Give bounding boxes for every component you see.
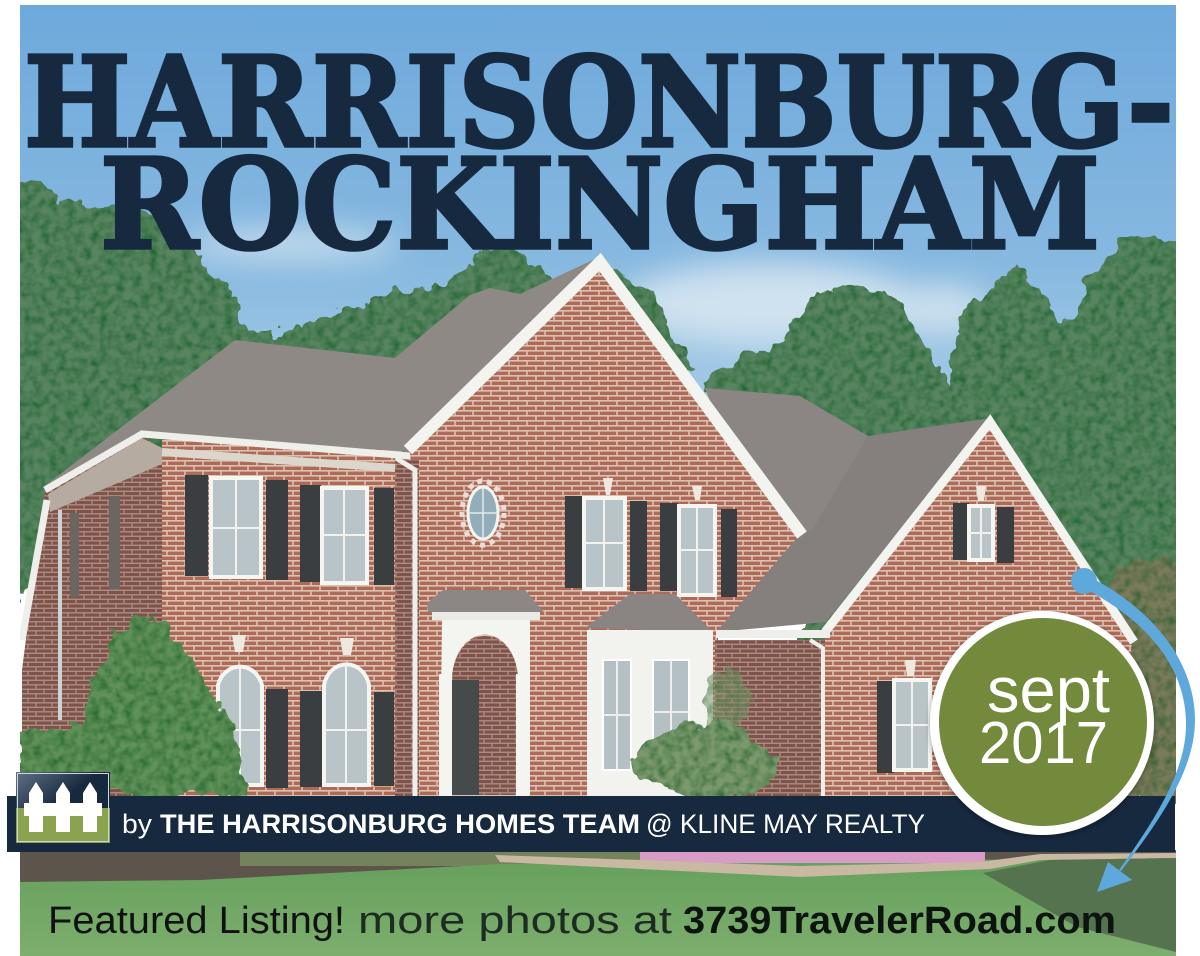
pink flowers bbox=[640, 851, 985, 863]
house: windows bbox=[211, 478, 993, 785]
house: rear right roof bbox=[705, 388, 868, 540]
shrub: small tree by the bay bbox=[633, 667, 777, 798]
footer caption: 3739TravelerRoad.com bbox=[683, 900, 1116, 942]
seal text bbox=[979, 654, 1110, 776]
house: keystones bbox=[232, 478, 986, 676]
house: front porch bbox=[427, 590, 544, 796]
house: right wing walls bbox=[715, 640, 825, 798]
seal text: sept bbox=[987, 654, 1110, 726]
lawn shadow bbox=[983, 858, 1176, 952]
seal text: 2017 bbox=[979, 710, 1108, 776]
house: cornices and gutters bbox=[22, 434, 830, 796]
trees: right bbox=[700, 235, 1200, 800]
house: bay window bbox=[585, 594, 713, 796]
house: window muntins bbox=[211, 480, 993, 785]
house: oval window bbox=[462, 481, 504, 545]
mulch bed bbox=[20, 850, 1176, 882]
house: shutters bbox=[185, 475, 1014, 788]
lawn bbox=[20, 858, 1176, 956]
footer caption: Featured Listing! bbox=[48, 900, 345, 942]
trees: left and middle bbox=[20, 180, 696, 603]
sky bbox=[20, 5, 1176, 425]
house: right wing roof bbox=[716, 418, 990, 632]
house: upper roof bbox=[395, 258, 597, 450]
banner bbox=[7, 796, 1175, 852]
house: left wing roof bbox=[42, 340, 428, 488]
house: center wall bbox=[395, 262, 802, 798]
house: side windows bbox=[70, 496, 120, 597]
footer caption: more photos at bbox=[358, 900, 673, 942]
arrow: from house to web address bbox=[1071, 568, 1195, 892]
house: right gable trim bbox=[825, 422, 1134, 642]
clouds bbox=[180, 231, 990, 347]
shrubs along the walk bbox=[240, 852, 640, 866]
house: left side wall bbox=[22, 436, 162, 798]
house: main gable trim bbox=[408, 262, 802, 535]
byline: THE HARRISONBURG HOMES TEAM bbox=[160, 809, 640, 839]
shrub: large left bush bbox=[20, 614, 245, 795]
house: front left wall bbox=[162, 440, 402, 798]
seal: sept 2017 bbox=[930, 611, 1154, 835]
walkway bbox=[495, 853, 1176, 877]
footer caption bbox=[48, 900, 1116, 942]
byline bbox=[122, 809, 925, 839]
byline: by bbox=[122, 809, 153, 839]
byline: @ KLINE MAY REALTY bbox=[646, 809, 925, 839]
title bbox=[24, 30, 1174, 278]
logo: picket fence bbox=[16, 772, 110, 843]
title: ROCKINGHAM bbox=[100, 132, 1100, 278]
house: left soffit bbox=[48, 438, 162, 512]
